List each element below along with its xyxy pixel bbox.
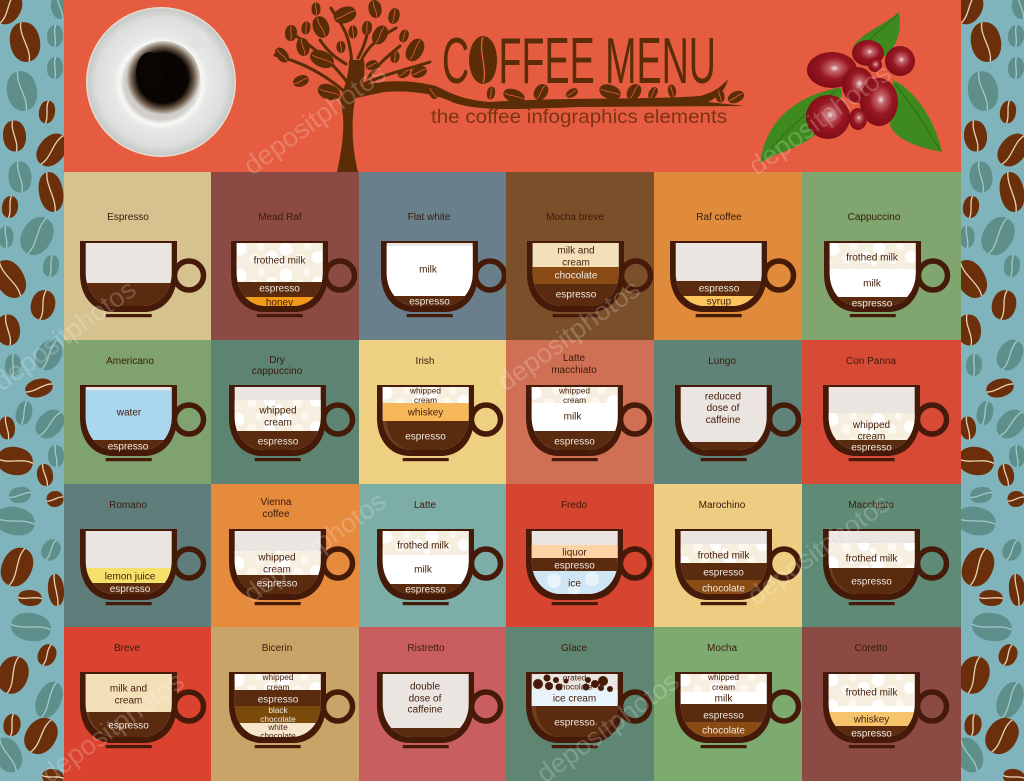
cup: caffeine — [706, 415, 741, 426]
cup: dose of — [707, 403, 740, 414]
cup: espresso — [554, 436, 595, 448]
heading: Dry — [269, 355, 285, 366]
cup: milk — [414, 564, 433, 576]
cup — [823, 385, 946, 461]
cup: frothed milk — [397, 540, 450, 552]
cup — [229, 672, 352, 748]
heading: Latte — [563, 353, 586, 364]
heading: Bicerin — [262, 643, 292, 654]
panel: Latte macchiato: macchiato — [551, 365, 597, 376]
cup: cream — [563, 395, 586, 405]
heading: Espresso — [107, 212, 149, 223]
panel: Coretto — [802, 627, 961, 781]
cup: milk — [863, 278, 882, 290]
panel: Cappuccino — [802, 172, 961, 340]
panel: Dry cappuccino — [211, 340, 359, 484]
cup: espresso — [405, 432, 446, 442]
icon: coffee berries and leaves — [760, 12, 942, 163]
panel: Fredo — [506, 484, 654, 627]
panel: Vienna coffee: coffee — [262, 509, 290, 520]
cup: cream — [263, 564, 291, 576]
cup: milk and — [557, 246, 595, 256]
heading: Romano — [109, 500, 147, 511]
cup: espresso — [703, 710, 744, 722]
icon: coffee tree — [272, 0, 746, 172]
cup — [80, 241, 204, 317]
cup: liquor — [562, 548, 587, 558]
cup: espresso — [703, 568, 744, 578]
heading: Mocha — [707, 643, 737, 654]
cup: milk and — [110, 684, 147, 694]
cup: espresso — [851, 442, 892, 454]
cup: whipped — [257, 552, 296, 564]
cup: cream — [115, 696, 142, 706]
heading: Raf coffee — [696, 212, 742, 223]
cup: whipped — [262, 672, 294, 682]
cup: whiskey — [853, 714, 889, 726]
watermarks: depositphotos — [238, 58, 392, 181]
heading: Lungo — [708, 356, 736, 367]
cup — [527, 241, 650, 317]
panel: Ristretto — [359, 627, 506, 781]
title: COFFEE MENU — [442, 24, 716, 97]
cup: whipped — [707, 672, 739, 682]
panel: Dry cappuccino: cappuccino — [252, 366, 303, 377]
cup: cream — [264, 418, 292, 428]
cup — [675, 672, 798, 748]
cup — [823, 672, 946, 748]
heading: Latte — [414, 500, 437, 511]
cup: espresso — [110, 584, 151, 595]
heading: Cappuccino — [848, 212, 901, 223]
cup: ice — [568, 578, 581, 590]
cup: espresso — [852, 298, 893, 310]
cup: caffeine — [408, 704, 443, 716]
heading: Fredo — [561, 500, 587, 511]
watermarks: depositphotos — [742, 488, 896, 611]
heading: Breve — [114, 643, 140, 654]
cup: milk — [715, 694, 733, 704]
cup: espresso — [108, 442, 149, 452]
cup — [80, 385, 204, 461]
cup: white — [267, 722, 288, 732]
cup — [526, 529, 650, 605]
cup — [526, 385, 650, 461]
heading: Mead Raf — [258, 212, 302, 223]
panel: Bicerin — [211, 627, 359, 781]
cup — [675, 529, 798, 605]
panel: Lungo — [654, 340, 802, 484]
cup: espresso — [259, 284, 300, 294]
panel: Raf coffee — [654, 172, 802, 340]
cup: espresso — [699, 284, 740, 294]
panel: left coffee-bean strip — [0, 0, 74, 781]
cup: frothed milk — [698, 550, 750, 562]
heading: Vienna — [261, 497, 292, 508]
heading: Ristretto — [407, 643, 445, 654]
panel: Glace — [506, 627, 654, 781]
cup: frothed milk — [846, 554, 898, 564]
heading: Glace — [561, 643, 587, 654]
watermarks: depositphotos — [492, 274, 646, 397]
cup: chocolate — [260, 714, 296, 724]
cup: whiskey — [407, 408, 443, 418]
panel: header — [64, 0, 961, 172]
cup — [824, 241, 948, 317]
heading: Marochino — [699, 500, 746, 511]
panel: Breve — [64, 627, 211, 781]
cup: black — [268, 705, 289, 715]
panel: Americano — [64, 340, 211, 484]
subtitle: the coffee infographics elements — [431, 107, 727, 128]
heading: Con Panna — [846, 356, 896, 367]
heading: Macchiato — [848, 500, 894, 511]
cup: whipped — [409, 386, 441, 396]
cup: cream — [414, 395, 437, 405]
cup: dose of — [409, 694, 442, 704]
heading: Coretto — [855, 643, 888, 654]
cup: chocolate — [555, 270, 598, 282]
cup: ice cream — [553, 694, 596, 704]
watermarks: depositphotos — [743, 58, 897, 181]
cup: espresso — [258, 436, 299, 448]
heading: Americano — [106, 356, 154, 367]
cup: syrup — [707, 296, 732, 308]
cup: frothed milk — [254, 256, 306, 266]
icon: coffee bean letter O — [469, 36, 497, 84]
cup: espresso — [108, 720, 149, 732]
panel: Espresso — [64, 172, 211, 340]
panel: Marochino — [654, 484, 802, 627]
panel: Flat white — [359, 172, 506, 340]
cup: whipped — [852, 420, 890, 431]
cup — [381, 241, 504, 317]
cup: espresso — [257, 578, 298, 590]
cup — [231, 241, 354, 317]
panel: Mocha breve — [506, 172, 654, 340]
cup — [823, 529, 946, 605]
cup: cream — [266, 682, 290, 692]
cup: milk — [564, 412, 582, 422]
panel: right coffee-bean strip — [949, 0, 1024, 781]
cup — [377, 529, 500, 605]
cup: honey — [266, 298, 293, 308]
cup: frothed milk — [846, 688, 898, 698]
cup: chocolate — [702, 584, 745, 594]
cup: espresso — [554, 560, 595, 572]
cup — [675, 385, 798, 461]
panel: Latte — [359, 484, 506, 627]
watermarks: depositphotos — [238, 486, 392, 609]
cup: espresso — [851, 728, 892, 740]
cup: cream — [712, 682, 735, 692]
cup: espresso — [851, 576, 892, 588]
panel: Mead Raf — [211, 172, 359, 340]
panel: Irish — [359, 340, 506, 484]
panel: Con Panna — [802, 340, 961, 484]
cup: lemon juice — [105, 572, 156, 582]
cup: espresso — [554, 718, 595, 728]
cup — [377, 385, 500, 461]
cup: cream — [562, 258, 590, 268]
cup: espresso — [405, 584, 446, 596]
cup: espresso — [258, 694, 299, 706]
cup: whipped — [258, 406, 297, 416]
panel: Latte macchiato — [506, 340, 654, 484]
cup — [80, 529, 204, 605]
cup: grated — [563, 672, 587, 682]
cup — [229, 529, 352, 605]
heading: Flat white — [408, 212, 451, 223]
cup: espresso — [409, 296, 450, 308]
cup: double — [410, 682, 440, 692]
panel: Mocha — [654, 627, 802, 781]
cup — [377, 672, 500, 748]
cup: espresso — [556, 290, 597, 300]
cup — [80, 672, 204, 748]
heading: Irish — [416, 356, 434, 367]
cup — [229, 385, 352, 461]
cup: cream — [858, 432, 885, 442]
cup: frothed milk — [846, 252, 899, 264]
cup: chocolate — [557, 682, 593, 692]
icon: coffee cup top view — [86, 7, 236, 157]
cup: reduced — [705, 392, 741, 402]
cup: whipped — [558, 386, 590, 396]
heading: Mocha breve — [546, 212, 604, 223]
cup: water — [116, 408, 142, 418]
cup — [526, 672, 650, 748]
cup: chocolate — [260, 730, 296, 740]
cup — [670, 241, 794, 317]
panel: Vienna coffee — [211, 484, 359, 627]
cup: milk — [419, 264, 438, 276]
panel: Macchiato — [802, 484, 961, 627]
panel: Romano — [64, 484, 211, 627]
cup: chocolate — [702, 726, 745, 736]
